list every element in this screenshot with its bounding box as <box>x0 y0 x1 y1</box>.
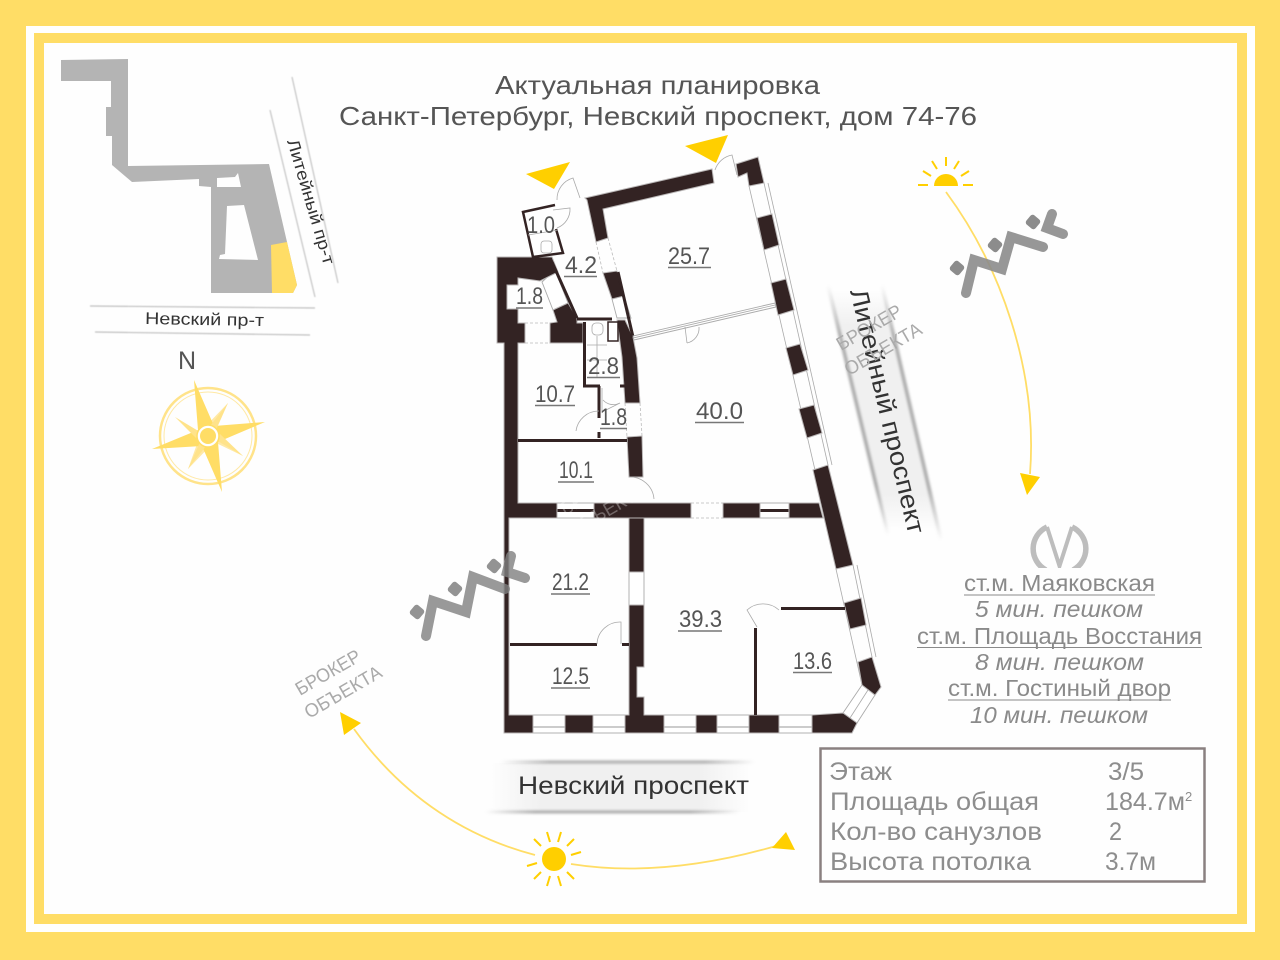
row: bathrooms <box>830 818 1122 846</box>
label: broker right: ОБЪЕКТА <box>841 319 926 380</box>
site map: highlighted apartment <box>271 242 297 293</box>
title: Актуальная планировка <box>495 70 821 100</box>
room 40.0: 40.0 <box>696 398 743 425</box>
row: area: 184.7м <box>1105 788 1185 816</box>
walk time 10: 10 мин. пешком <box>970 702 1148 728</box>
windows and frames <box>533 183 876 733</box>
row: area: Площадь общая <box>830 788 1039 816</box>
arrow head <box>1020 473 1040 495</box>
street strip: Nevsky prospekt <box>485 760 755 814</box>
doors <box>553 155 779 644</box>
row: area: 2 <box>1185 789 1192 804</box>
label: broker left: БРОКЕР <box>292 646 365 700</box>
site map: Nevsky street label <box>90 306 315 335</box>
glass partition <box>633 303 776 340</box>
room 10.7: 10.7 <box>535 381 575 408</box>
row: ceiling height: 3.7м <box>1105 848 1156 876</box>
room 1.8 upper: 1.8 <box>516 283 543 310</box>
station: Ploshchad Vosstaniya: ст.м. Площадь Восстания <box>917 623 1202 649</box>
arrow head: right <box>772 832 795 850</box>
title: Санкт-Петербург, Невский проспект, дом 74-76 <box>339 101 977 131</box>
room 1.0: 1.0 <box>527 212 555 239</box>
site map: Liteyny street label: Литейный пр-т <box>283 137 338 267</box>
site map: Liteyny street label <box>270 77 338 297</box>
street strip: Nevsky prospekt: Невский проспект <box>518 772 750 800</box>
room 21.2: 21.2 <box>552 569 589 596</box>
site map: building footprint <box>61 59 297 293</box>
floor plan <box>497 155 881 733</box>
room 10.1: 10.1 <box>559 457 593 484</box>
sanitary fixtures <box>528 230 607 378</box>
site map: Nevsky street label: Невский пр-т <box>145 309 264 330</box>
dashed openings <box>525 238 723 518</box>
walk time 5: 5 мин. пешком <box>975 596 1143 622</box>
street strip: Liteyny prospekt: Литейный проспект <box>844 286 930 537</box>
row: ceiling height <box>830 848 1156 876</box>
sun path: bottom <box>340 712 795 886</box>
entrance arrow: top <box>685 135 728 163</box>
metro stations <box>917 570 1202 728</box>
room 39.3: 39.3 <box>679 606 722 633</box>
walk time 8: 8 мин. пешком <box>975 649 1144 675</box>
icon: rising sun <box>918 157 973 186</box>
station: Gostiny Dvor: ст.м. Гостиный двор <box>948 675 1171 701</box>
compass rose <box>152 380 265 492</box>
label: broker right: БРОКЕР <box>833 301 906 355</box>
room labels <box>516 212 832 690</box>
row: floor: 3/5 <box>1108 758 1144 786</box>
load-bearing walls <box>497 157 881 733</box>
room 25.7: 25.7 <box>668 243 710 270</box>
row: ceiling height: Высота потолка <box>830 848 1031 876</box>
sun path: top right <box>918 157 1040 495</box>
station: Mayakovskaya: ст.м. Маяковская <box>964 570 1155 596</box>
street strip: Liteyny prospekt <box>828 285 941 540</box>
icon: sun <box>527 832 581 886</box>
row: floor: Этаж <box>829 758 892 786</box>
room 1.8 lower: 1.8 <box>600 404 627 431</box>
row: area <box>830 788 1192 816</box>
icon: stairs figure right <box>949 214 1063 293</box>
icon: stairs figure left <box>409 556 525 636</box>
room 4.2: 4.2 <box>565 252 597 279</box>
icon: metro logo <box>1033 527 1086 570</box>
watermark on wall: ОБЪЕКТА <box>565 480 650 541</box>
room 2.8: 2.8 <box>588 353 619 380</box>
entrance arrow: left <box>526 162 570 189</box>
compass north label: N <box>178 347 196 375</box>
partitions <box>510 205 845 715</box>
room 12.5: 12.5 <box>552 663 589 690</box>
arrow head: left <box>340 712 361 735</box>
watermark on wall: БРОКЕР <box>557 466 630 520</box>
label: broker left: ОБЪЕКТА <box>301 662 386 723</box>
row: floor <box>829 758 1144 786</box>
room 13.6: 13.6 <box>793 648 832 675</box>
info box <box>820 748 1204 882</box>
row: bathrooms: 2 <box>1109 818 1122 846</box>
title <box>339 70 977 131</box>
row: bathrooms: Кол-во санузлов <box>830 818 1042 846</box>
